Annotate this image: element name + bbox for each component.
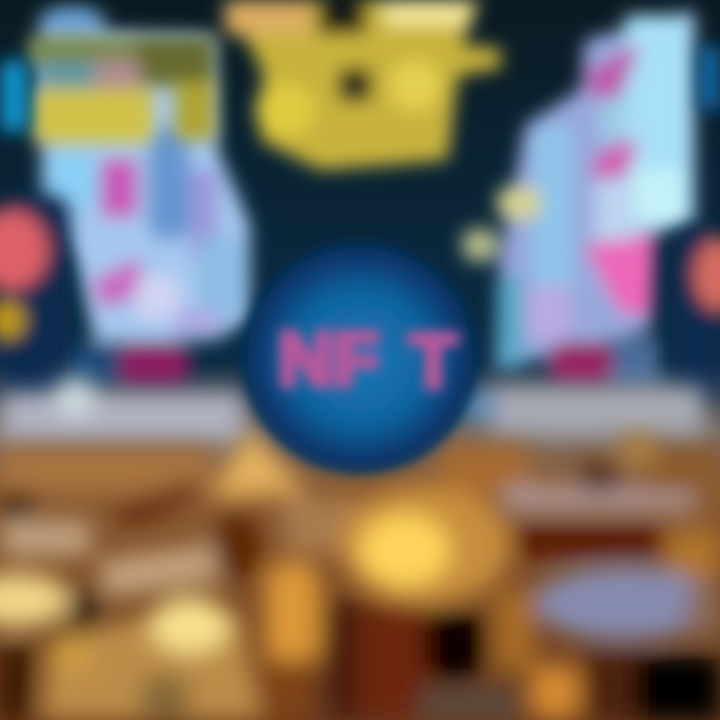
coins <box>0 430 720 720</box>
left banner yellow lettering <box>28 36 215 143</box>
right coins <box>505 485 695 511</box>
left coins <box>0 448 210 493</box>
centre coin <box>440 445 530 495</box>
panel: left banner <box>38 6 250 386</box>
NFT label: NF <box>278 317 379 402</box>
right edge token <box>672 45 720 405</box>
NFT token <box>242 242 478 474</box>
left edge token <box>0 60 70 400</box>
white tabletop band <box>0 376 705 442</box>
panel: right banner <box>462 10 695 388</box>
token disc <box>242 242 478 474</box>
top yellow emblem <box>225 0 502 170</box>
NFT label: T <box>410 319 456 404</box>
